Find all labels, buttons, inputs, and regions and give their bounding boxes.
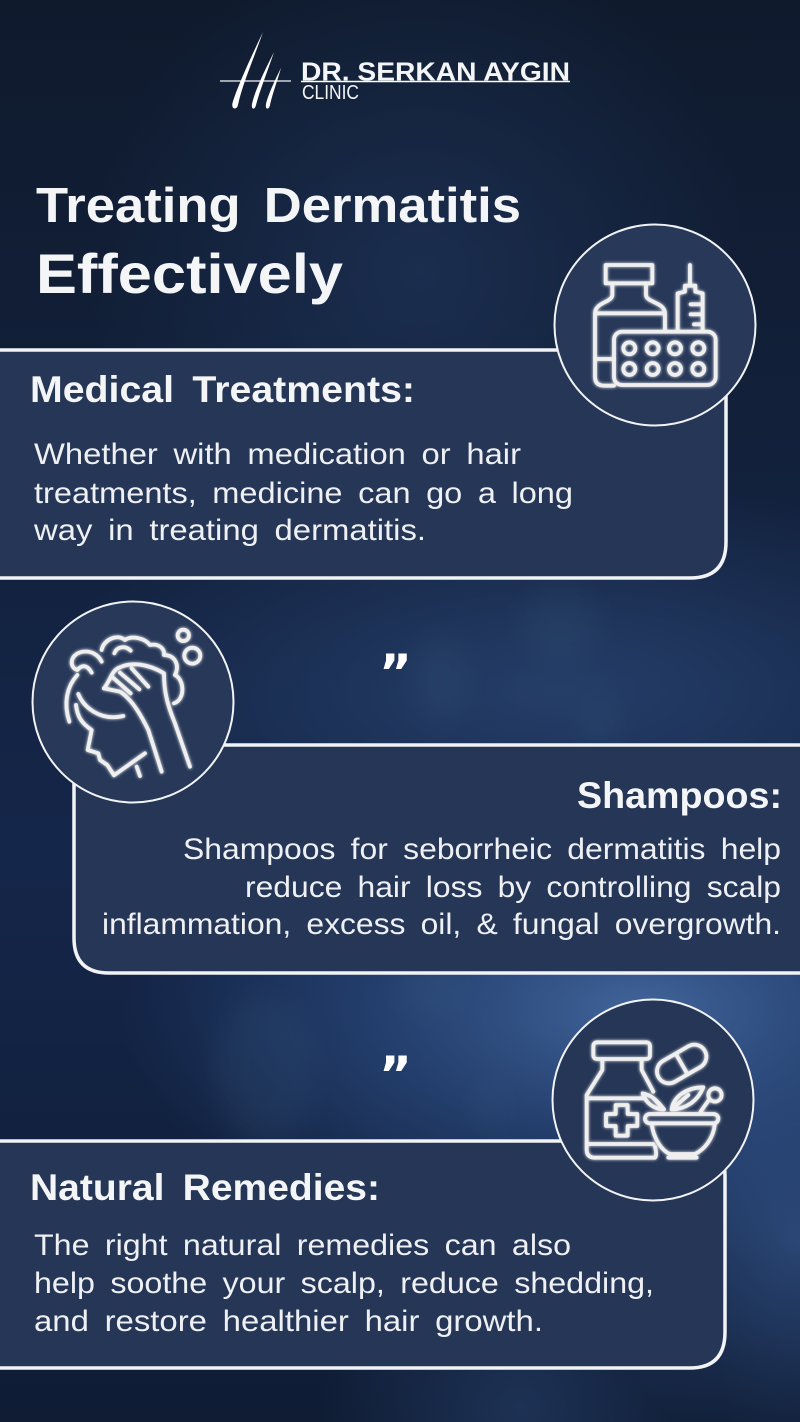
body text: The right natural remedies can also — [34, 1229, 571, 1262]
logo underline — [301, 80, 570, 82]
title: Effectively — [36, 242, 343, 305]
body text: Whether with medication or hair — [34, 438, 521, 471]
title: Treating Dermatitis — [36, 179, 521, 233]
panel: shampoos — [74, 745, 800, 973]
logo — [220, 32, 570, 109]
body text: reduce hair loss by controlling scalp — [245, 871, 781, 904]
body text — [102, 833, 781, 941]
body text: help soothe your scalp, reduce shedding, — [34, 1267, 654, 1300]
quote mark: ” — [379, 1046, 412, 1104]
body text: way in treating dermatitis. — [33, 514, 426, 547]
heading: Shampoos: — [577, 775, 782, 816]
card shape — [0, 1141, 725, 1368]
logo subtitle: CLINIC — [302, 82, 359, 104]
icon: medicine bottle, capsule, herbs and mortar — [552, 1000, 754, 1200]
logo mark: hair strands — [220, 32, 291, 109]
panel: natural remedies — [0, 1141, 725, 1368]
body text: and restore healthier hair growth. — [34, 1305, 543, 1338]
body text: treatments, medicine can go a long — [34, 477, 573, 510]
icon: medicine bottle, syringe and blister pack — [554, 224, 756, 426]
logo name: DR. SERKAN AYGIN — [301, 56, 570, 86]
card shape — [74, 745, 800, 973]
quote mark: ” — [379, 644, 412, 702]
card shape — [0, 350, 726, 578]
body text — [34, 1229, 654, 1338]
body text: Shampoos for seborrheic dermatitis help — [183, 833, 781, 866]
title — [36, 179, 521, 305]
body text: inflammation, excess oil, & fungal overgrowth. — [102, 908, 781, 941]
heading: Natural Remedies: — [30, 1167, 380, 1208]
panel: medical treatments — [0, 350, 726, 578]
icon: hands washing hair — [32, 602, 234, 802]
body text — [33, 438, 573, 547]
heading: Medical Treatments: — [30, 369, 415, 410]
